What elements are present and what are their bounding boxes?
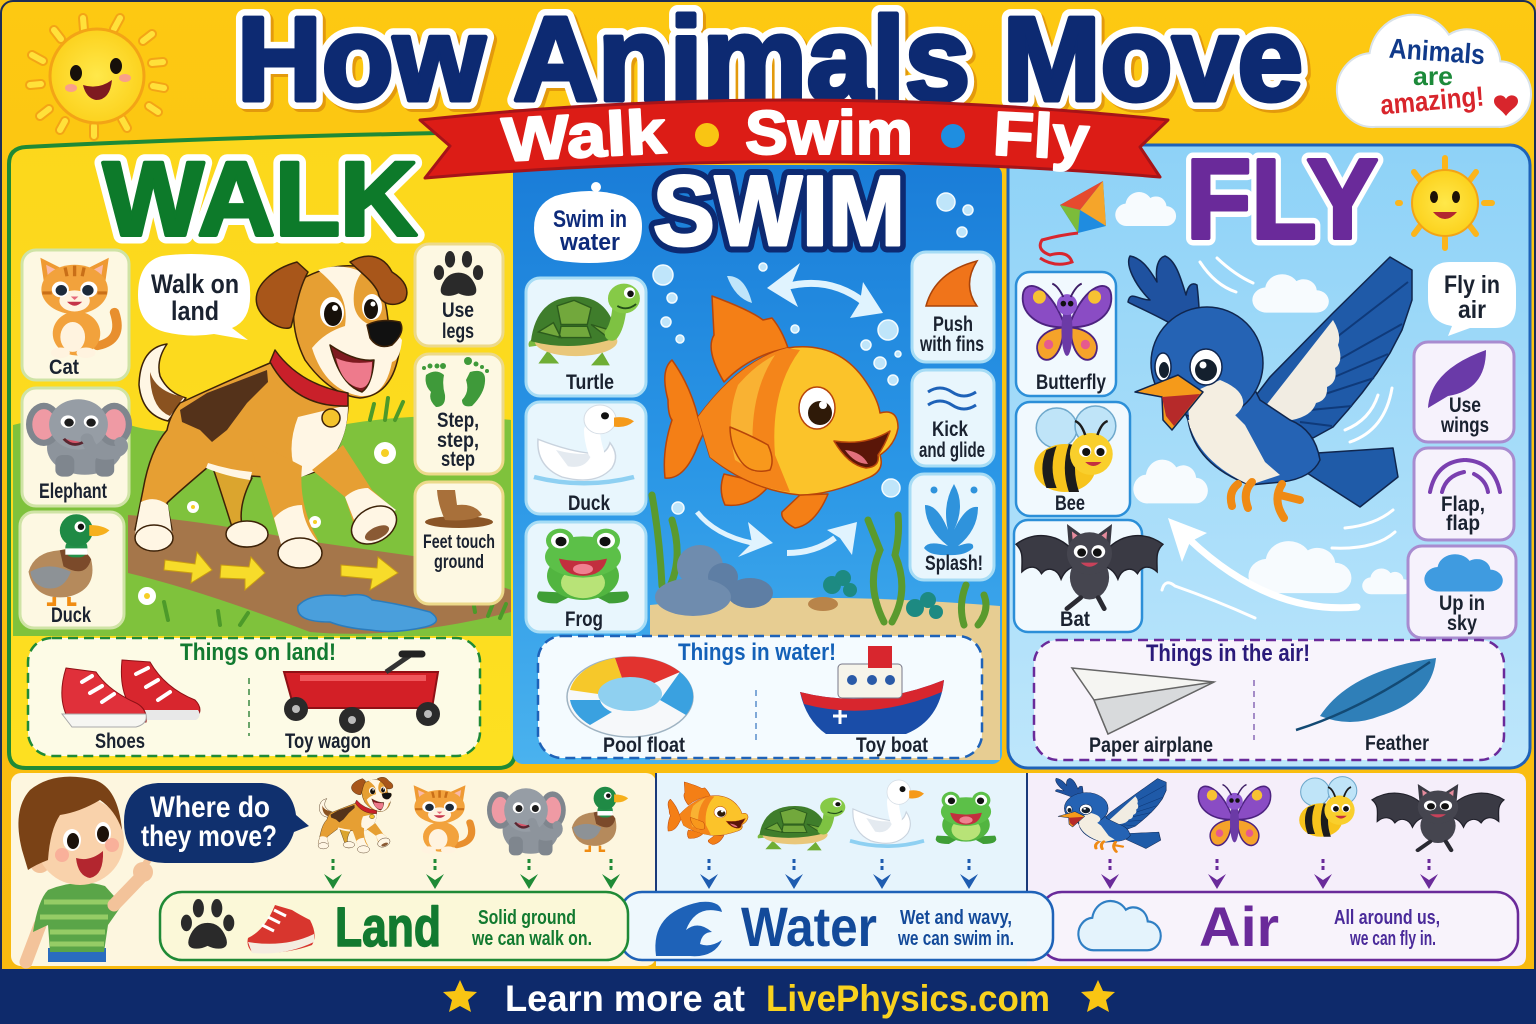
panel: walk [9, 133, 515, 768]
card: flap flap [1414, 448, 1514, 540]
box: things on land: Things on land! [180, 639, 336, 666]
heading: SWIM: SWIM [653, 155, 905, 266]
icon: small sun [1398, 158, 1492, 248]
row: air animals [1055, 777, 1504, 852]
card: splash: Splash! [925, 552, 983, 575]
footer bar: Learn more at [505, 978, 745, 1019]
box: things in water: Pool float [603, 734, 685, 757]
ribbon: walk swim fly: Fly [991, 100, 1091, 173]
speech bubble: where do they move: Where do [150, 791, 270, 824]
card: butterfly [1016, 272, 1116, 396]
box: things in water: Things in water! [678, 639, 836, 666]
speech bubble: where do they move: they move? [141, 820, 277, 853]
speech bubble: fly in air: air [1458, 296, 1486, 324]
row: land animals [318, 777, 628, 855]
arrows: animals to air [1101, 859, 1438, 889]
bottom panel: where do they move [11, 773, 1526, 966]
arrow: upward swoosh [1168, 518, 1357, 608]
card: feet touch ground [415, 482, 503, 604]
card: flap flap: Flap, [1441, 493, 1485, 516]
card: use legs: legs [442, 320, 474, 343]
label box: water: we can swim in. [897, 928, 1014, 950]
panel: swim [513, 165, 1002, 764]
card: splash [910, 474, 994, 580]
heading: FLY: FLY [1186, 136, 1378, 262]
box: things in the air: Paper airplane [1089, 734, 1213, 757]
icon: kite [1040, 181, 1106, 264]
card: use legs: Use [442, 299, 474, 322]
card: kick and glide: Kick [932, 418, 968, 441]
box: things in the air: Feather [1365, 732, 1429, 755]
heading: WALK: WALK [103, 141, 417, 258]
cloud bubble: swim in water [534, 182, 642, 263]
wind lines [1162, 258, 1395, 618]
box: things in the air: Things in the air! [1146, 640, 1310, 667]
card: frog [526, 522, 646, 632]
illustration: boy pointing [18, 777, 154, 962]
icon: toy wagon [284, 654, 440, 733]
cloud badge: Animals are amazing [1337, 15, 1531, 127]
speech bubble: fly in air: Fly in [1444, 271, 1500, 299]
box: things on land [28, 638, 480, 756]
ribbon: walk swim fly [420, 98, 1168, 178]
card: elephant [22, 388, 132, 506]
card: duck [20, 512, 124, 628]
label box: air: All around us, [1334, 907, 1440, 929]
icon: toy boat [800, 646, 944, 734]
box: things on land: Shoes [95, 730, 145, 753]
speech bubble: walk on land [138, 254, 250, 340]
card: use wings: Use [1449, 394, 1481, 417]
card: step step step [415, 354, 503, 474]
label box: air: Air [1199, 895, 1279, 958]
heading: SWIM: SWIM [653, 155, 905, 266]
box: things in water [538, 636, 982, 758]
card: feet touch ground: Feet touch [423, 532, 495, 553]
arrows: water motion [697, 263, 883, 557]
label box: land: Land [335, 895, 441, 958]
card: step step step: Step, [437, 409, 479, 432]
card: butterfly: Butterfly [1036, 371, 1106, 394]
icon: sun top left [30, 18, 164, 136]
card: push with fins [912, 252, 994, 362]
speech bubble: where do they move [124, 783, 309, 863]
cloud badge: Animals are amazing: amazing! [1379, 81, 1485, 120]
card: bat: Bat [1060, 608, 1090, 631]
box: things in the air [1034, 640, 1504, 760]
box: things in water: Toy boat [856, 734, 928, 757]
illustration: dog [135, 256, 407, 568]
label box: land: Solid ground [478, 907, 576, 929]
label box: land: we can walk on. [471, 928, 592, 950]
card: push with fins: Push [933, 313, 973, 336]
card: bee: Bee [1055, 492, 1085, 515]
card: white duck: Duck [568, 492, 610, 515]
footer bar [0, 969, 1536, 1024]
card: use legs [415, 244, 503, 346]
illustration: fish [664, 296, 898, 528]
arrows: walking direction [164, 552, 398, 590]
card: kick and glide: and glide [919, 439, 985, 462]
card: frog: Frog [565, 608, 603, 631]
card: white duck [526, 402, 646, 515]
card: duck: Duck [51, 604, 91, 627]
cloud badge: Animals are amazing: are [1413, 61, 1453, 91]
card: kick and glide [912, 370, 994, 466]
speech bubble: fly in air [1428, 262, 1516, 336]
cloud badge: Animals are amazing: Animals [1388, 33, 1486, 70]
panel: fly [1008, 145, 1530, 768]
card: use wings [1414, 342, 1514, 442]
icon: shoes [62, 660, 200, 727]
ribbon: walk swim fly: Walk [500, 98, 668, 175]
speech bubble: walk on land: Walk on [151, 269, 239, 299]
label box: water: Water [741, 895, 877, 958]
grass and path scene [13, 398, 511, 636]
icon: pool float [567, 657, 693, 737]
label box: air: we can fly in. [1349, 928, 1436, 950]
card: feet touch ground: ground [434, 552, 484, 573]
card: cat: Cat [49, 356, 79, 379]
card: step step step: step, [437, 429, 479, 452]
row: water animals [668, 780, 996, 850]
card: elephant: Elephant [39, 480, 107, 503]
card: flap flap: flap [1446, 512, 1480, 535]
icon: feather [1296, 658, 1436, 730]
card: push with fins: with fins [919, 333, 984, 356]
heading: WALK: WALK [103, 141, 417, 258]
card: bat [1014, 520, 1163, 632]
icon: paper airplane [1072, 668, 1214, 734]
seabed scene [650, 193, 1000, 760]
card: up in sky: Up in [1439, 592, 1485, 615]
illustration: bird [1128, 256, 1412, 518]
label box: air [1040, 892, 1518, 960]
card: up in sky: sky [1447, 612, 1477, 635]
cloud bubble: swim in water: Swim in [553, 206, 627, 233]
card: use wings: wings [1440, 414, 1489, 437]
footer bar: LivePhysics.com [766, 978, 1050, 1019]
card: turtle: Turtle [566, 371, 614, 394]
cloud bubble: swim in water: water [559, 229, 620, 256]
speech bubble: walk on land: land [171, 296, 219, 326]
label box: water: Wet and wavy, [900, 907, 1012, 929]
label box: water [620, 892, 1053, 960]
ribbon: walk swim fly: Swim [745, 99, 913, 168]
label box: land [160, 892, 628, 960]
box: things on land: Toy wagon [285, 730, 371, 753]
heading: FLY: FLY [1186, 136, 1378, 262]
card: bee [1016, 402, 1130, 516]
arrows: animals to land [324, 859, 620, 889]
card: step step step: step [441, 448, 475, 471]
card: up in sky [1408, 546, 1516, 638]
arrows: animals to water [700, 859, 978, 889]
sky clouds [1115, 192, 1411, 594]
card: turtle [526, 278, 646, 396]
card: cat [22, 250, 129, 380]
